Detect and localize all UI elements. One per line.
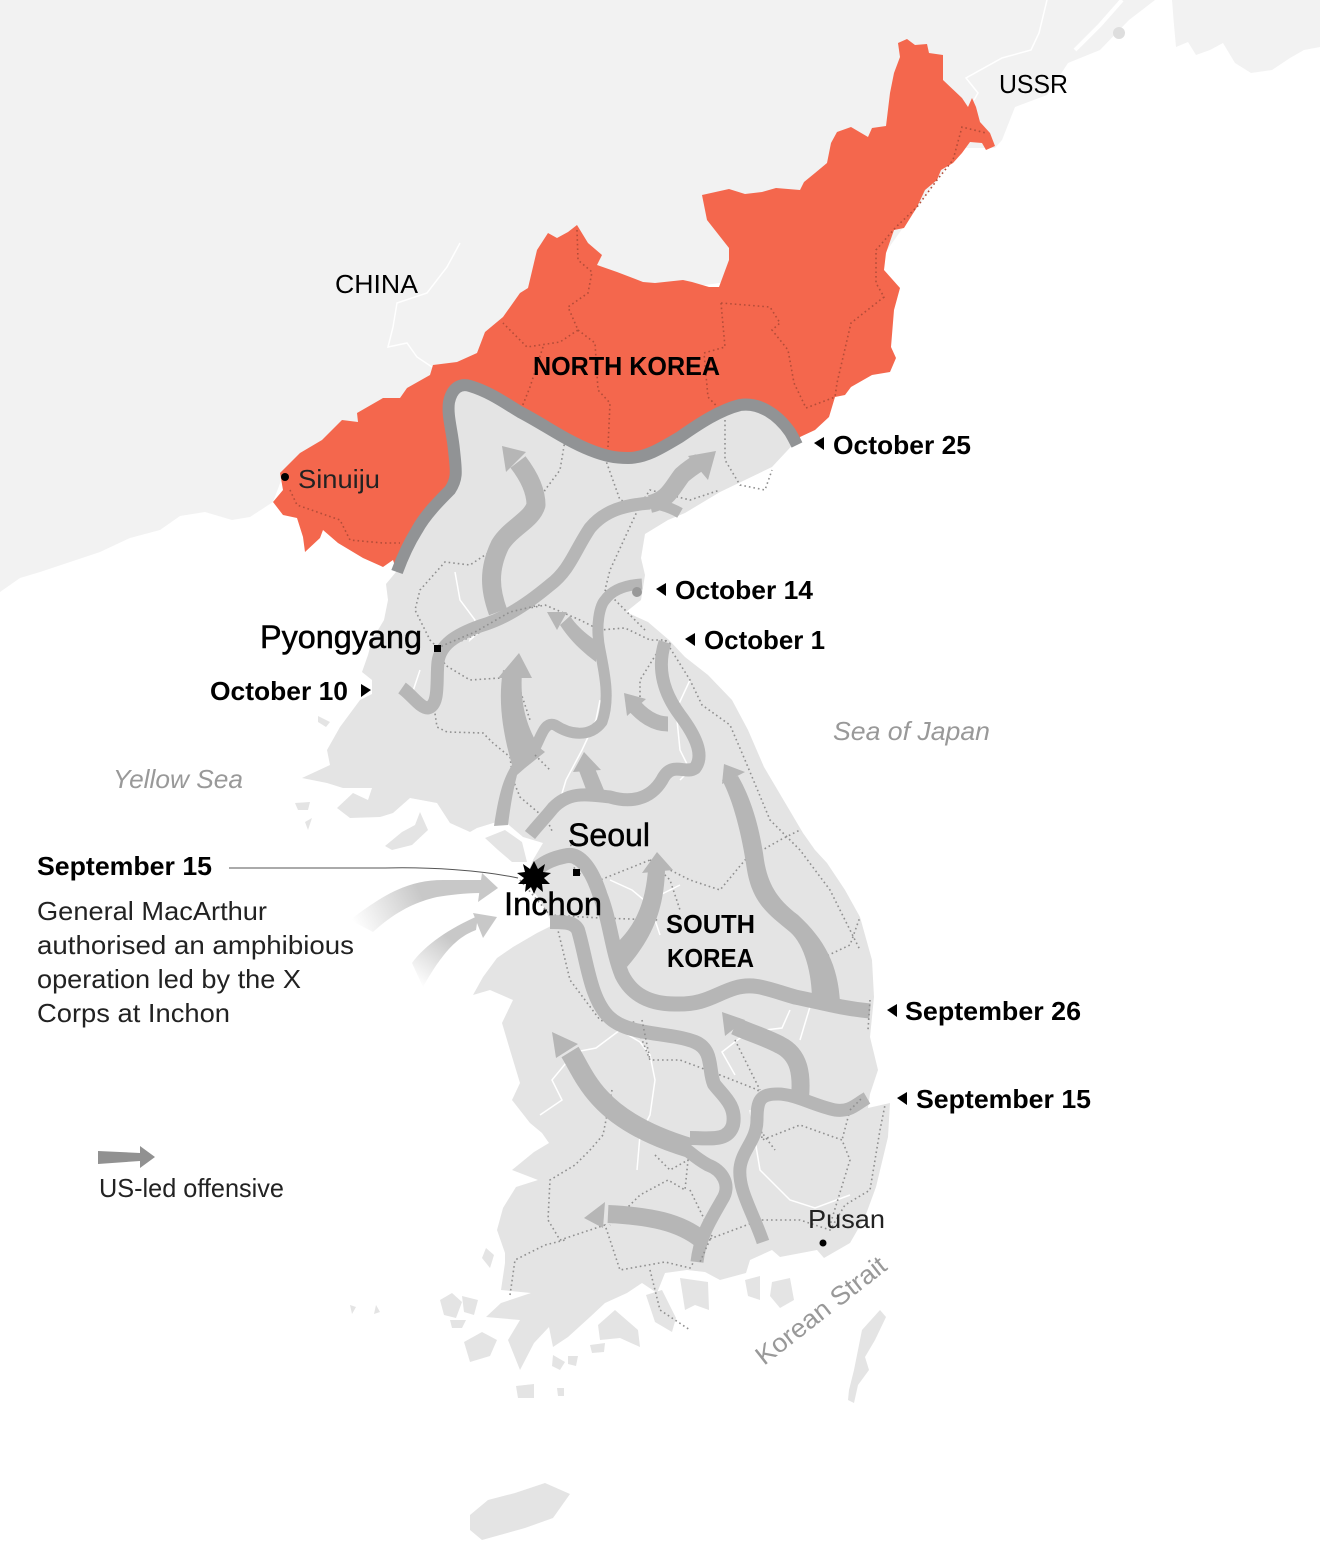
route: central north arrow — [494, 653, 545, 826]
sea label: Korean Strait: Korean Strait — [749, 1249, 893, 1371]
city: Inchon: Inchon — [504, 886, 602, 922]
legend: US-led offensive: US-led offensive — [99, 1173, 284, 1203]
route: September 26 to Seoul — [538, 855, 870, 1011]
arrow: amphibious landing, lower — [412, 913, 497, 987]
arrows: US-led offensive routes — [350, 446, 870, 1262]
route: northward to October 1 — [530, 642, 699, 835]
route: central advance to Inchon — [550, 922, 734, 1138]
date label: October 10: October 10 — [210, 676, 348, 706]
country label: North Korea: NORTH KOREA — [533, 351, 720, 381]
date label: October 1: October 1 — [704, 625, 825, 655]
route: east side big arrow — [722, 764, 840, 1002]
sea label: Yellow Sea: Yellow Sea — [113, 764, 243, 794]
country label: South Korea: SOUTH — [666, 909, 755, 939]
city: Sinuiju: Sinuiju — [298, 464, 380, 494]
South and occupied Korean peninsula land — [295, 380, 890, 1540]
dotted boundaries over arrows — [437, 605, 870, 1262]
callout: September 15 Inchon landing: operation led by the X — [37, 964, 301, 994]
country label: China: CHINA — [335, 269, 419, 299]
icon: explosion at Inchon — [517, 861, 551, 894]
callout: September 15 Inchon landing: authorised an amphibious — [37, 930, 354, 960]
city: Pusan: Pusan — [808, 1204, 885, 1234]
date label: October 14: October 14 — [675, 575, 814, 605]
arrow: amphibious landing, upper — [350, 873, 498, 932]
city: Pyongyang: Pyongyang — [260, 619, 422, 655]
callout: September 15 Inchon landing: General MacArthur — [37, 896, 267, 926]
route: south-west advance — [552, 1032, 726, 1262]
callout: September 15 Inchon landing: Corps at Inchon — [37, 998, 230, 1028]
route: north arrow to Sinuiju direction — [492, 446, 536, 612]
callout: September 15 Inchon landing: September 15 — [37, 851, 212, 881]
country label: USSR: USSR — [999, 69, 1068, 99]
route: to October 14 — [530, 584, 642, 755]
North Korea territory — [273, 39, 995, 572]
date label: October 25: October 25 — [833, 430, 971, 460]
callout: September 15 Inchon landing — [37, 851, 518, 1028]
route: Oct 10 and north-east arrow — [402, 451, 716, 708]
city: Seoul: Seoul — [568, 817, 650, 853]
route: Pusan to east coast — [722, 1012, 867, 1242]
route: branch arrow near Seoul — [617, 852, 673, 967]
front line: October 25 — [397, 385, 797, 572]
country label: South Korea: KOREA — [667, 943, 754, 973]
sea label: Sea of Japan: Sea of Japan — [833, 716, 990, 746]
legend: US-led offensive — [98, 1146, 284, 1203]
neighbouring land: China and USSR — [0, 0, 1320, 592]
date label: September 26: September 26 — [905, 996, 1081, 1026]
city: Seoul — [568, 817, 650, 876]
city: Pusan — [808, 1204, 885, 1246]
country label: South Korea — [666, 909, 755, 973]
date label: September 15: September 15 — [916, 1084, 1091, 1114]
